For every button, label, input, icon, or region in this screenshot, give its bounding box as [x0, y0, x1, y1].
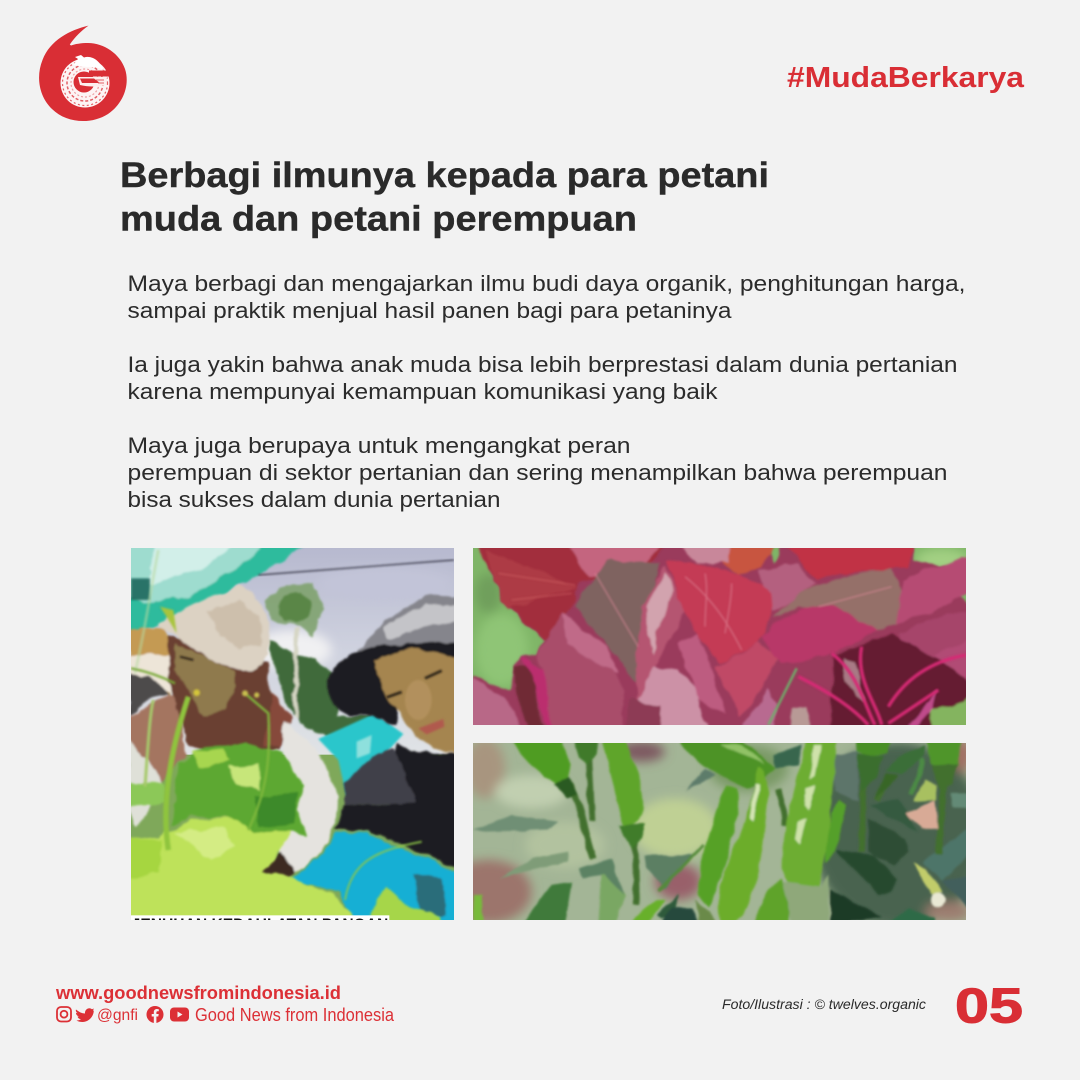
photo credit: Foto/Ilustrasi : © twelves.organic — [722, 997, 926, 1012]
page number: 05 — [955, 980, 1023, 1034]
footer: website and social links — [55, 983, 395, 1025]
cropped caption strip — [131, 914, 389, 935]
body text: sampai praktik menjual hasil panen bagi para petaninya — [128, 298, 732, 323]
right woman — [292, 595, 462, 927]
social handle: @gnfi — [97, 1007, 138, 1024]
body text: Ia juga yakin bahwa anak muda bisa lebih berprestasi dalam dunia pertanian — [128, 352, 958, 377]
body text: perempuan di sektor pertanian dan sering menampilkan bahwa perempuan — [128, 460, 947, 485]
body text: Maya juga berupaya untuk mengangkat peran — [128, 433, 630, 458]
website url: www.goodnewsfromindonesia.id — [55, 983, 341, 1003]
body text: karena mempunyai kemampuan komunikasi yang baik — [128, 379, 718, 404]
photo: red amaranth leaves — [473, 548, 966, 725]
icon: instagram — [57, 1007, 71, 1022]
sign lettering on net — [131, 578, 150, 600]
icon: facebook — [146, 1006, 164, 1023]
title — [120, 155, 769, 238]
body text: bisa sukses dalam dunia pertanian — [128, 487, 500, 512]
body text — [128, 271, 966, 512]
photo: two women farmers tending plants — [131, 548, 454, 920]
icon: twitter — [76, 1008, 94, 1022]
channel name: Good News from Indonesia — [195, 1005, 395, 1025]
title: Berbagi ilmunya kepada para petani — [120, 155, 769, 195]
foreground plants — [125, 743, 442, 927]
photo: green chili peppers — [473, 743, 966, 920]
leaf mass base — [473, 543, 972, 730]
icon: youtube — [170, 1008, 189, 1022]
hashtag: #MudaBerkarya — [787, 62, 1025, 94]
teal shade net — [125, 543, 310, 635]
left woman — [128, 587, 338, 893]
background trees — [267, 583, 372, 738]
turquoise tent — [318, 713, 403, 797]
title: muda dan petani perempuan — [120, 198, 637, 238]
logo: GNFI red six with garuda G — [39, 26, 127, 121]
body text: Maya berbagi dan mengajarkan ilmu budi daya organik, penghitungan harga, — [128, 271, 966, 296]
wire — [258, 560, 454, 575]
